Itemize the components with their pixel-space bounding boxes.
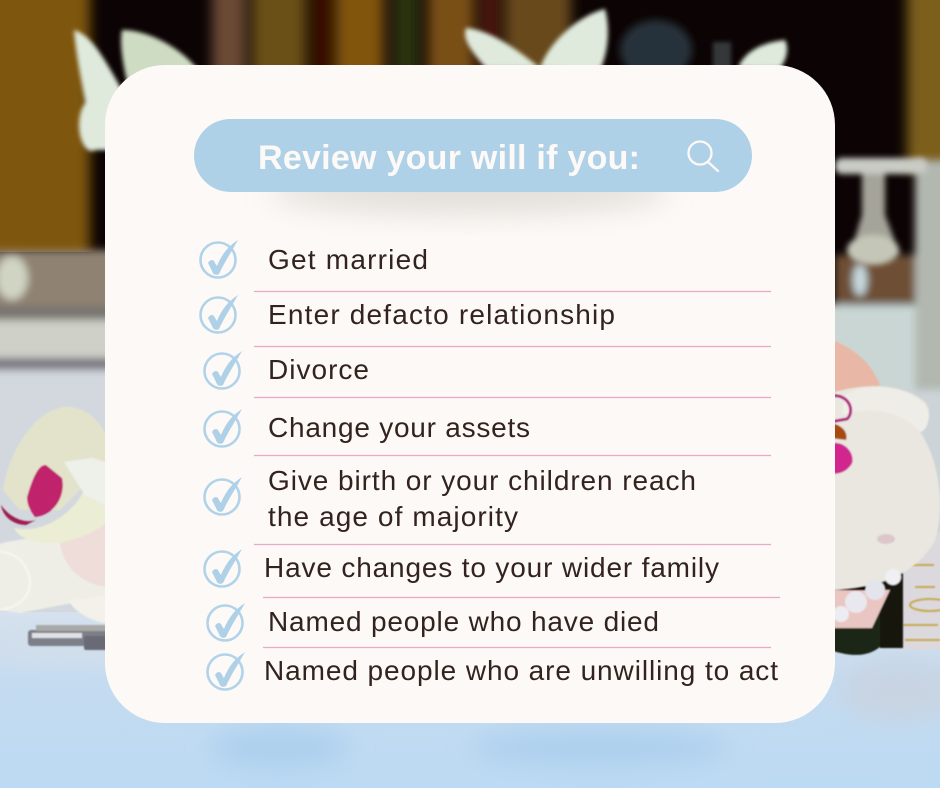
left orchid and napkin xyxy=(0,407,115,625)
item: give birth or children reach majority: the age of majority xyxy=(268,501,518,532)
white petals at top xyxy=(74,9,787,151)
right cloth with gold pattern xyxy=(900,532,940,650)
item: named people who have died: Named people who have died xyxy=(268,606,659,637)
item: enter defacto relationship xyxy=(200,295,615,332)
item: named people unwilling to act: Named people who are unwilling to act xyxy=(264,655,778,686)
right orchid, rose and pearls xyxy=(825,338,940,655)
heading shadow xyxy=(277,192,663,222)
item: get married xyxy=(200,240,428,278)
item: give birth or children reach majority: Give birth or your children reach xyxy=(268,465,696,496)
item: changes to wider family: Have changes to your wider family xyxy=(264,552,719,583)
panel: checklist card xyxy=(105,65,835,723)
item: divorce: Divorce xyxy=(268,354,369,385)
item: change your assets xyxy=(204,409,530,446)
blurred wine glass xyxy=(835,158,927,265)
item: divorce xyxy=(204,351,369,388)
item: enter defacto relationship: Enter defacto relationship xyxy=(268,299,615,330)
left table items behind flowers xyxy=(0,250,120,620)
curtain stripes xyxy=(0,0,940,280)
blurred dark bell xyxy=(620,20,692,80)
item: get married: Get married xyxy=(268,244,428,275)
item: give birth or children reach majority xyxy=(204,465,696,532)
table cloth xyxy=(0,612,940,788)
heading pill: Review your will if you: xyxy=(258,139,640,177)
item: change your assets: Change your assets xyxy=(268,412,530,443)
clip on table xyxy=(28,625,113,650)
heading pill xyxy=(194,119,752,192)
right glass area xyxy=(825,160,940,550)
icon: magnifying glass xyxy=(688,142,718,171)
cloth folds xyxy=(0,627,940,770)
